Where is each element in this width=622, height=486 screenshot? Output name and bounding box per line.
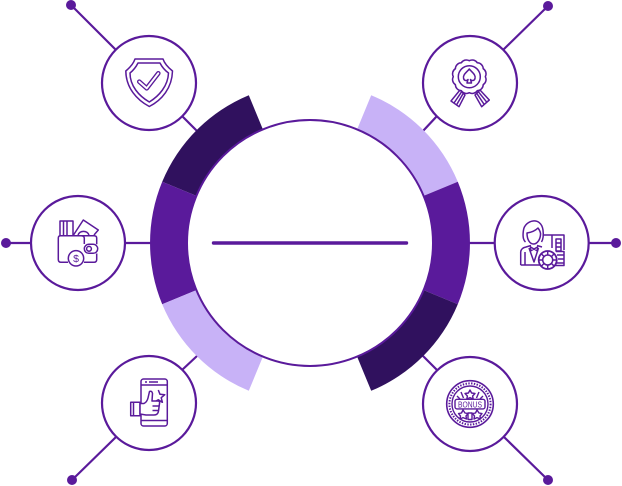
icon badge: casino dealer (495, 196, 589, 290)
ring segment: dark top-left (162, 95, 263, 196)
bonus label: BONUS (458, 399, 482, 409)
connector: right (468, 238, 621, 248)
ring segment: mid right (424, 182, 470, 304)
center divider line (214, 241, 406, 245)
center circle (187, 120, 433, 366)
icon badge: bonus wheel (423, 357, 517, 451)
connector: left (1, 238, 152, 248)
connector: top-right (423, 1, 553, 131)
icon badge: rosette (423, 36, 517, 130)
ring segment: dark bottom-right (357, 290, 458, 391)
connector: bottom-right (423, 356, 553, 485)
icon badge: wallet (31, 196, 125, 290)
icon badge: phone with thumbs up (102, 356, 196, 450)
ring segment: light top-right (357, 95, 458, 196)
connector: top-left (66, 0, 198, 132)
connector: bottom-left (67, 356, 197, 485)
ring segment: mid left (150, 182, 196, 304)
icon badge: shield (102, 36, 196, 130)
ring segment: light bottom-left (162, 290, 263, 391)
dollar sign: $ (73, 253, 79, 265)
